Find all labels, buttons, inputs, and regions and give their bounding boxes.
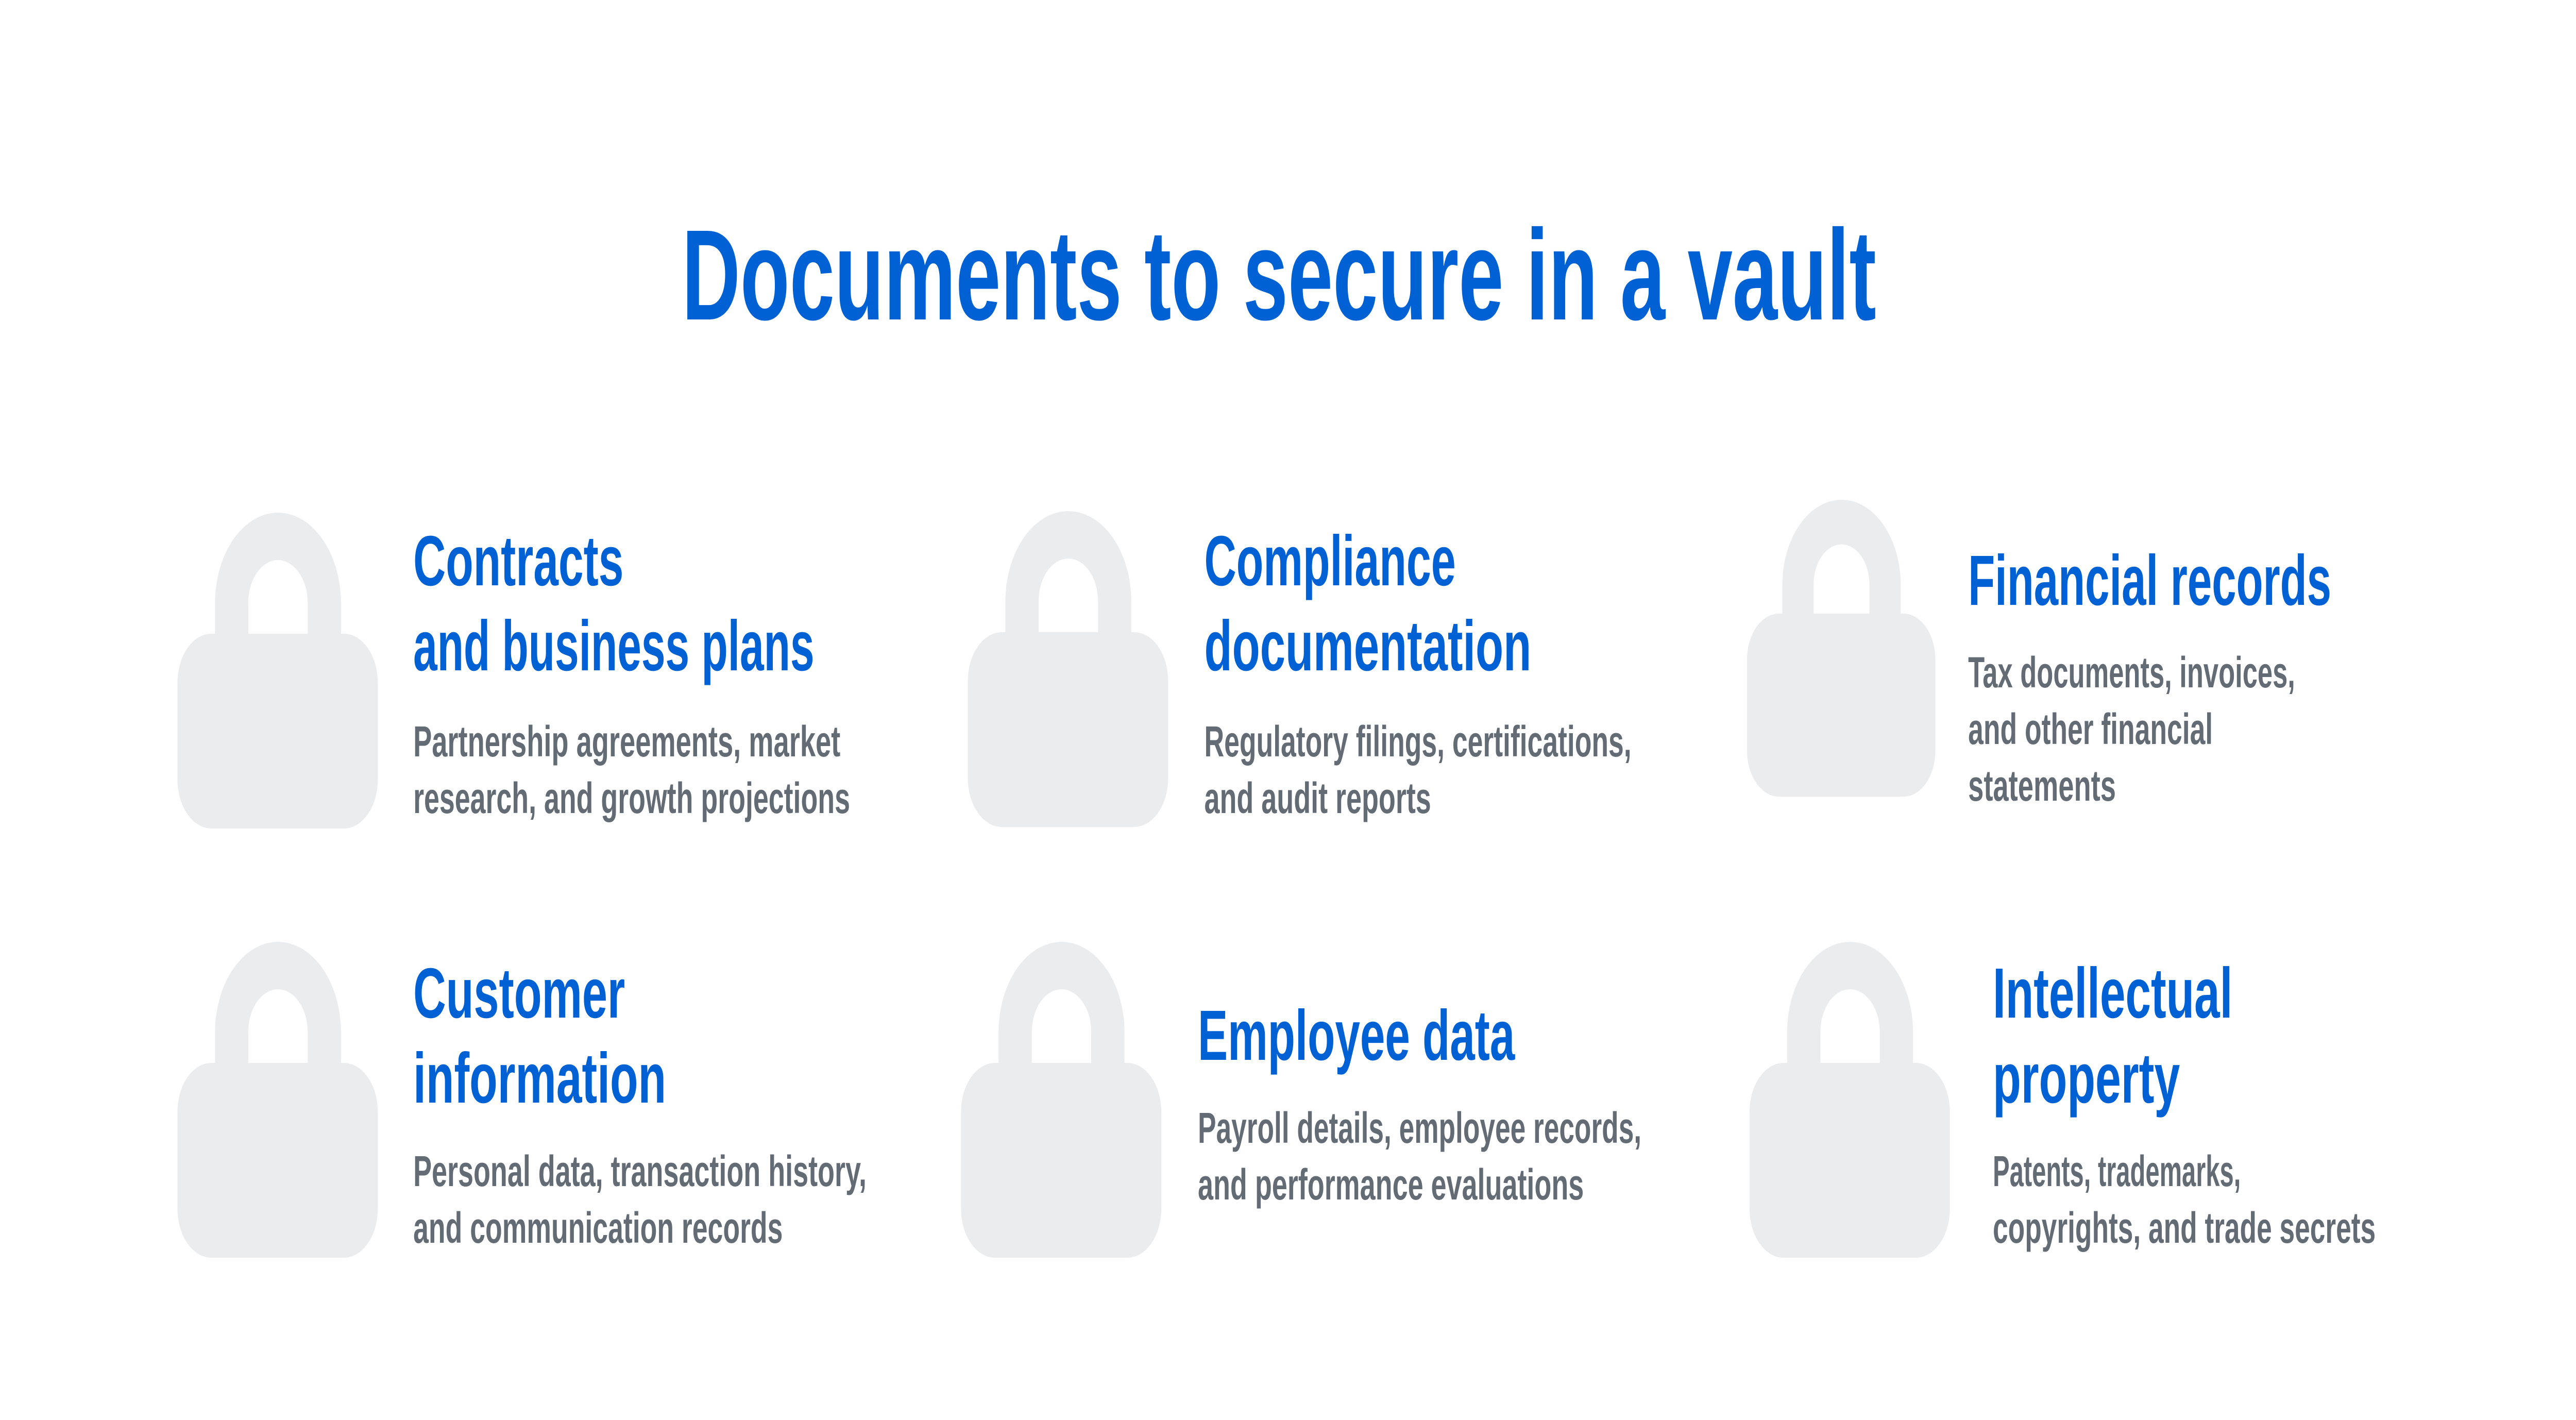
text: contracts: Partnership agreements, market (413, 718, 840, 766)
text: employee: Payroll details, employee records, (1198, 1105, 1641, 1153)
text: intellectual property: copyrights, and trade secrets (1993, 1205, 2376, 1253)
title: Documents to secure in a vault (682, 202, 1876, 347)
text: intellectual property: Patents, trademarks, (1993, 1148, 2241, 1196)
text: compliance: and audit reports (1205, 775, 1431, 823)
panel: compliance (968, 511, 1632, 827)
text: compliance (1205, 718, 1632, 823)
heading: customer: Customer (413, 954, 625, 1033)
panel: employee (961, 942, 1641, 1258)
heading: contracts: and business plans (413, 606, 815, 686)
heading: compliance: documentation (1205, 606, 1531, 686)
text: financial: Tax documents, invoices, (1968, 649, 2295, 697)
text: financial (1968, 649, 2295, 810)
text: compliance: Regulatory filings, certifications, (1205, 718, 1632, 766)
icon: lock compliance (968, 511, 1168, 827)
heading: contracts: Contracts (413, 521, 623, 601)
panel: customer (177, 942, 867, 1258)
text: contracts: research, and growth projections (413, 775, 850, 823)
heading: financial: Financial records (1968, 541, 2331, 620)
text: financial: and other financial (1968, 706, 2213, 754)
heading: customer (413, 954, 666, 1118)
icon: lock customer (177, 942, 378, 1258)
panel: contracts (177, 513, 850, 829)
heading: intellectual property (1993, 954, 2232, 1118)
heading: intellectual property: Intellectual (1993, 954, 2232, 1033)
text: employee: and performance evaluations (1198, 1161, 1584, 1209)
heading: intellectual property: property (1993, 1039, 2180, 1118)
text: customer: and communication records (413, 1205, 783, 1253)
icon: lock contracts (177, 513, 378, 829)
icon: lock intellectual property (1750, 942, 1950, 1258)
text: customer (413, 1148, 867, 1253)
text: customer: Personal data, transaction history, (413, 1148, 867, 1196)
heading: compliance (1205, 521, 1531, 686)
heading: contracts (413, 521, 815, 686)
heading: compliance: Compliance (1205, 521, 1456, 601)
icon: lock employee (961, 942, 1161, 1258)
text: employee (1198, 1105, 1641, 1209)
text: intellectual property (1993, 1148, 2376, 1253)
panel: intellectual property (1750, 942, 2376, 1258)
text: contracts (413, 718, 850, 823)
heading: customer: information (413, 1039, 666, 1118)
text: financial: statements (1968, 763, 2116, 810)
icon: lock financial (1747, 500, 1936, 797)
panel: financial (1747, 500, 2331, 810)
heading: employee: Employee data (1198, 996, 1515, 1075)
